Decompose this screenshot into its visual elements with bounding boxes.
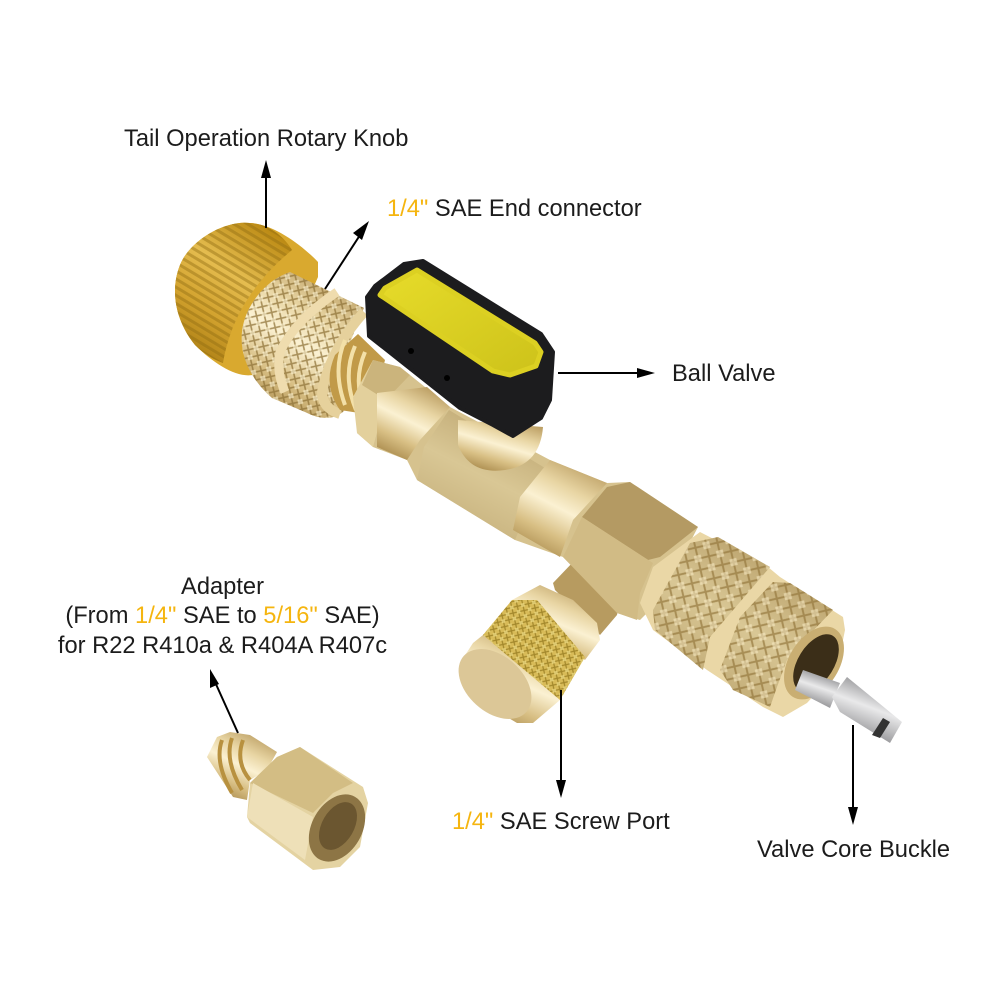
side branch <box>553 560 625 635</box>
arrow: ball valve <box>558 368 655 378</box>
arrow: end connector <box>325 221 369 289</box>
threaded neck <box>330 334 385 415</box>
label: adapter <box>58 574 387 659</box>
knurled connector <box>242 272 364 418</box>
valve core pin <box>795 670 902 743</box>
arrow: adapter <box>210 669 238 733</box>
hex section <box>563 482 698 620</box>
hex nut <box>353 360 410 447</box>
label: adapter: (From 1/4" SAE to 5/16" SAE) <box>65 603 380 629</box>
brass sleeve <box>377 387 450 460</box>
adapter fitting <box>207 732 377 872</box>
brass collar <box>513 460 607 557</box>
large knurled coupler <box>640 532 856 717</box>
arrow: rotary knob <box>261 160 271 228</box>
label: rotary knob: Tail Operation Rotary Knob <box>124 126 408 152</box>
arrow: valve core buckle <box>848 725 858 825</box>
label: end connector: 1/4" SAE End connector <box>387 196 642 222</box>
label: adapter: for R22 R410a & R404A R407c <box>58 633 387 659</box>
label: ball valve: Ball Valve <box>672 361 776 387</box>
label: valve core buckle: Valve Core Buckle <box>757 837 950 863</box>
pipe backing <box>357 360 698 620</box>
tail rotary knob <box>175 223 318 375</box>
arrow: screw port <box>556 690 566 798</box>
label: adapter: Adapter <box>181 574 264 600</box>
side screw port <box>445 585 600 733</box>
label: screw port: 1/4" SAE Screw Port <box>452 809 670 835</box>
main valve tool <box>175 223 902 743</box>
T body <box>417 410 545 540</box>
ball valve handle <box>367 261 553 436</box>
valve stem <box>458 420 543 471</box>
